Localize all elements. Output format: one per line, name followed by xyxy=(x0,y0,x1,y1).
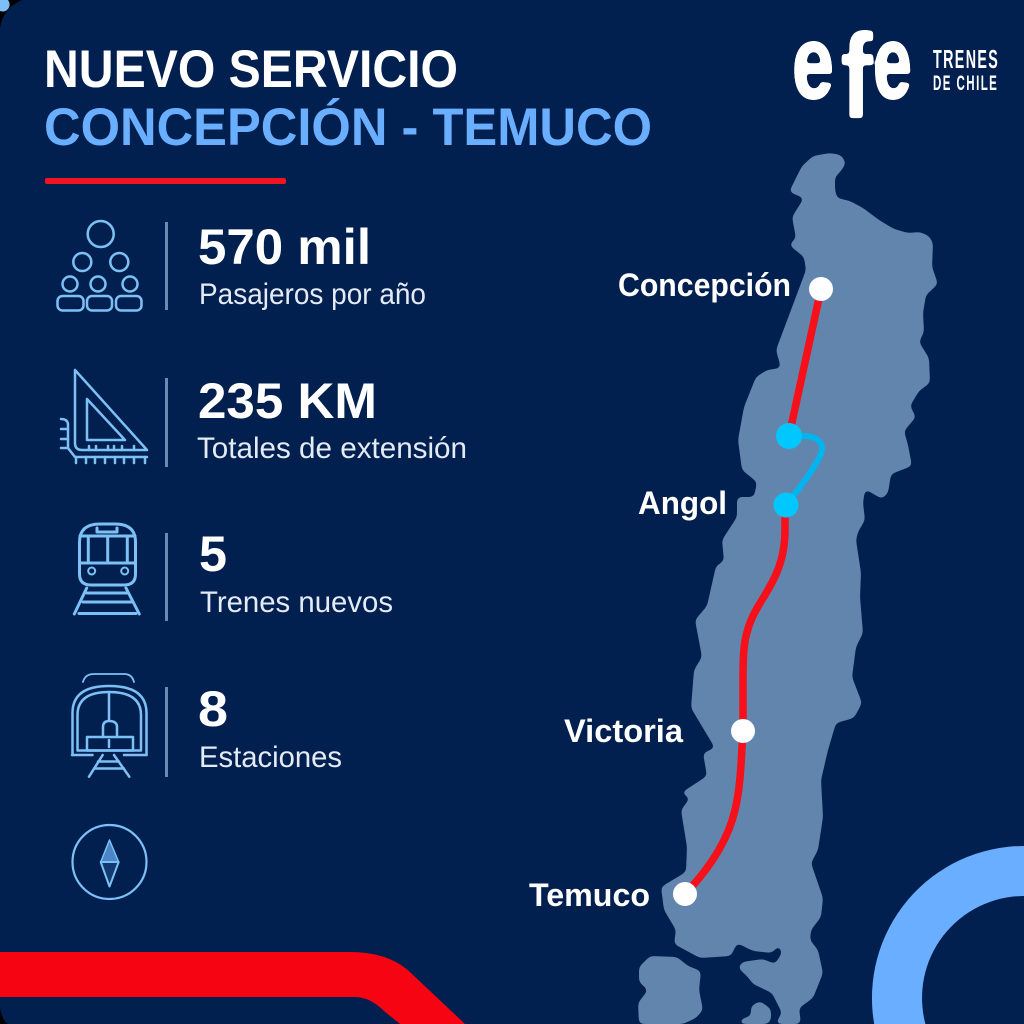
stat: trains xyxy=(74,524,393,621)
logo: efe trenes de chile: e xyxy=(873,5,912,121)
title underline xyxy=(45,178,286,184)
stop: Temuco: Temuco xyxy=(529,877,650,913)
stop: Angol: Angol xyxy=(638,485,727,521)
icon: station tunnel xyxy=(72,674,146,777)
value: 5: 5 xyxy=(199,526,227,582)
logo: efe trenes de chile: e xyxy=(792,5,834,121)
icon: compass xyxy=(72,825,146,899)
icon: train on tracks xyxy=(74,524,139,614)
caption: stations: Estaciones xyxy=(199,741,342,774)
logo: efe trenes de chile: f xyxy=(840,8,873,144)
logo: efe trenes de chile: TRENES xyxy=(933,46,999,74)
decorative red band xyxy=(0,952,465,1024)
rail route xyxy=(685,289,822,894)
value: 570 mil: 570 mil xyxy=(198,219,371,275)
icon: set square and ruler xyxy=(61,370,147,463)
island: small xyxy=(739,1001,771,1024)
logo: efe trenes de chile: DE CHILE xyxy=(933,71,998,95)
value: 235 KM: 235 KM xyxy=(198,373,377,429)
caption: passengers per year: Pasajeros por año xyxy=(199,278,426,311)
stat: length xyxy=(61,370,467,467)
title: NUEVO SERVICIO xyxy=(44,40,458,99)
stop: Victoria: Victoria xyxy=(564,713,683,749)
decorative blue ring xyxy=(872,846,1024,1024)
logo: efe trenes de chile xyxy=(792,5,999,144)
value: 8: 8 xyxy=(198,681,228,737)
stop: Victoria xyxy=(564,713,755,749)
caption: new trains: Trenes nuevos xyxy=(200,586,393,619)
map of the region xyxy=(638,153,938,1024)
title: CONCEPCIÓN - TEMUCO xyxy=(44,97,652,157)
junction stop xyxy=(776,423,802,449)
stat: passengers xyxy=(58,219,426,311)
icon: people xyxy=(58,221,142,310)
stop: Concepción: Concepción xyxy=(618,267,791,303)
caption: total length: Totales de extensión xyxy=(197,432,467,465)
title xyxy=(44,40,652,157)
stat: stations xyxy=(72,674,342,777)
stop: Angol xyxy=(638,485,798,521)
island: left xyxy=(638,956,703,1024)
